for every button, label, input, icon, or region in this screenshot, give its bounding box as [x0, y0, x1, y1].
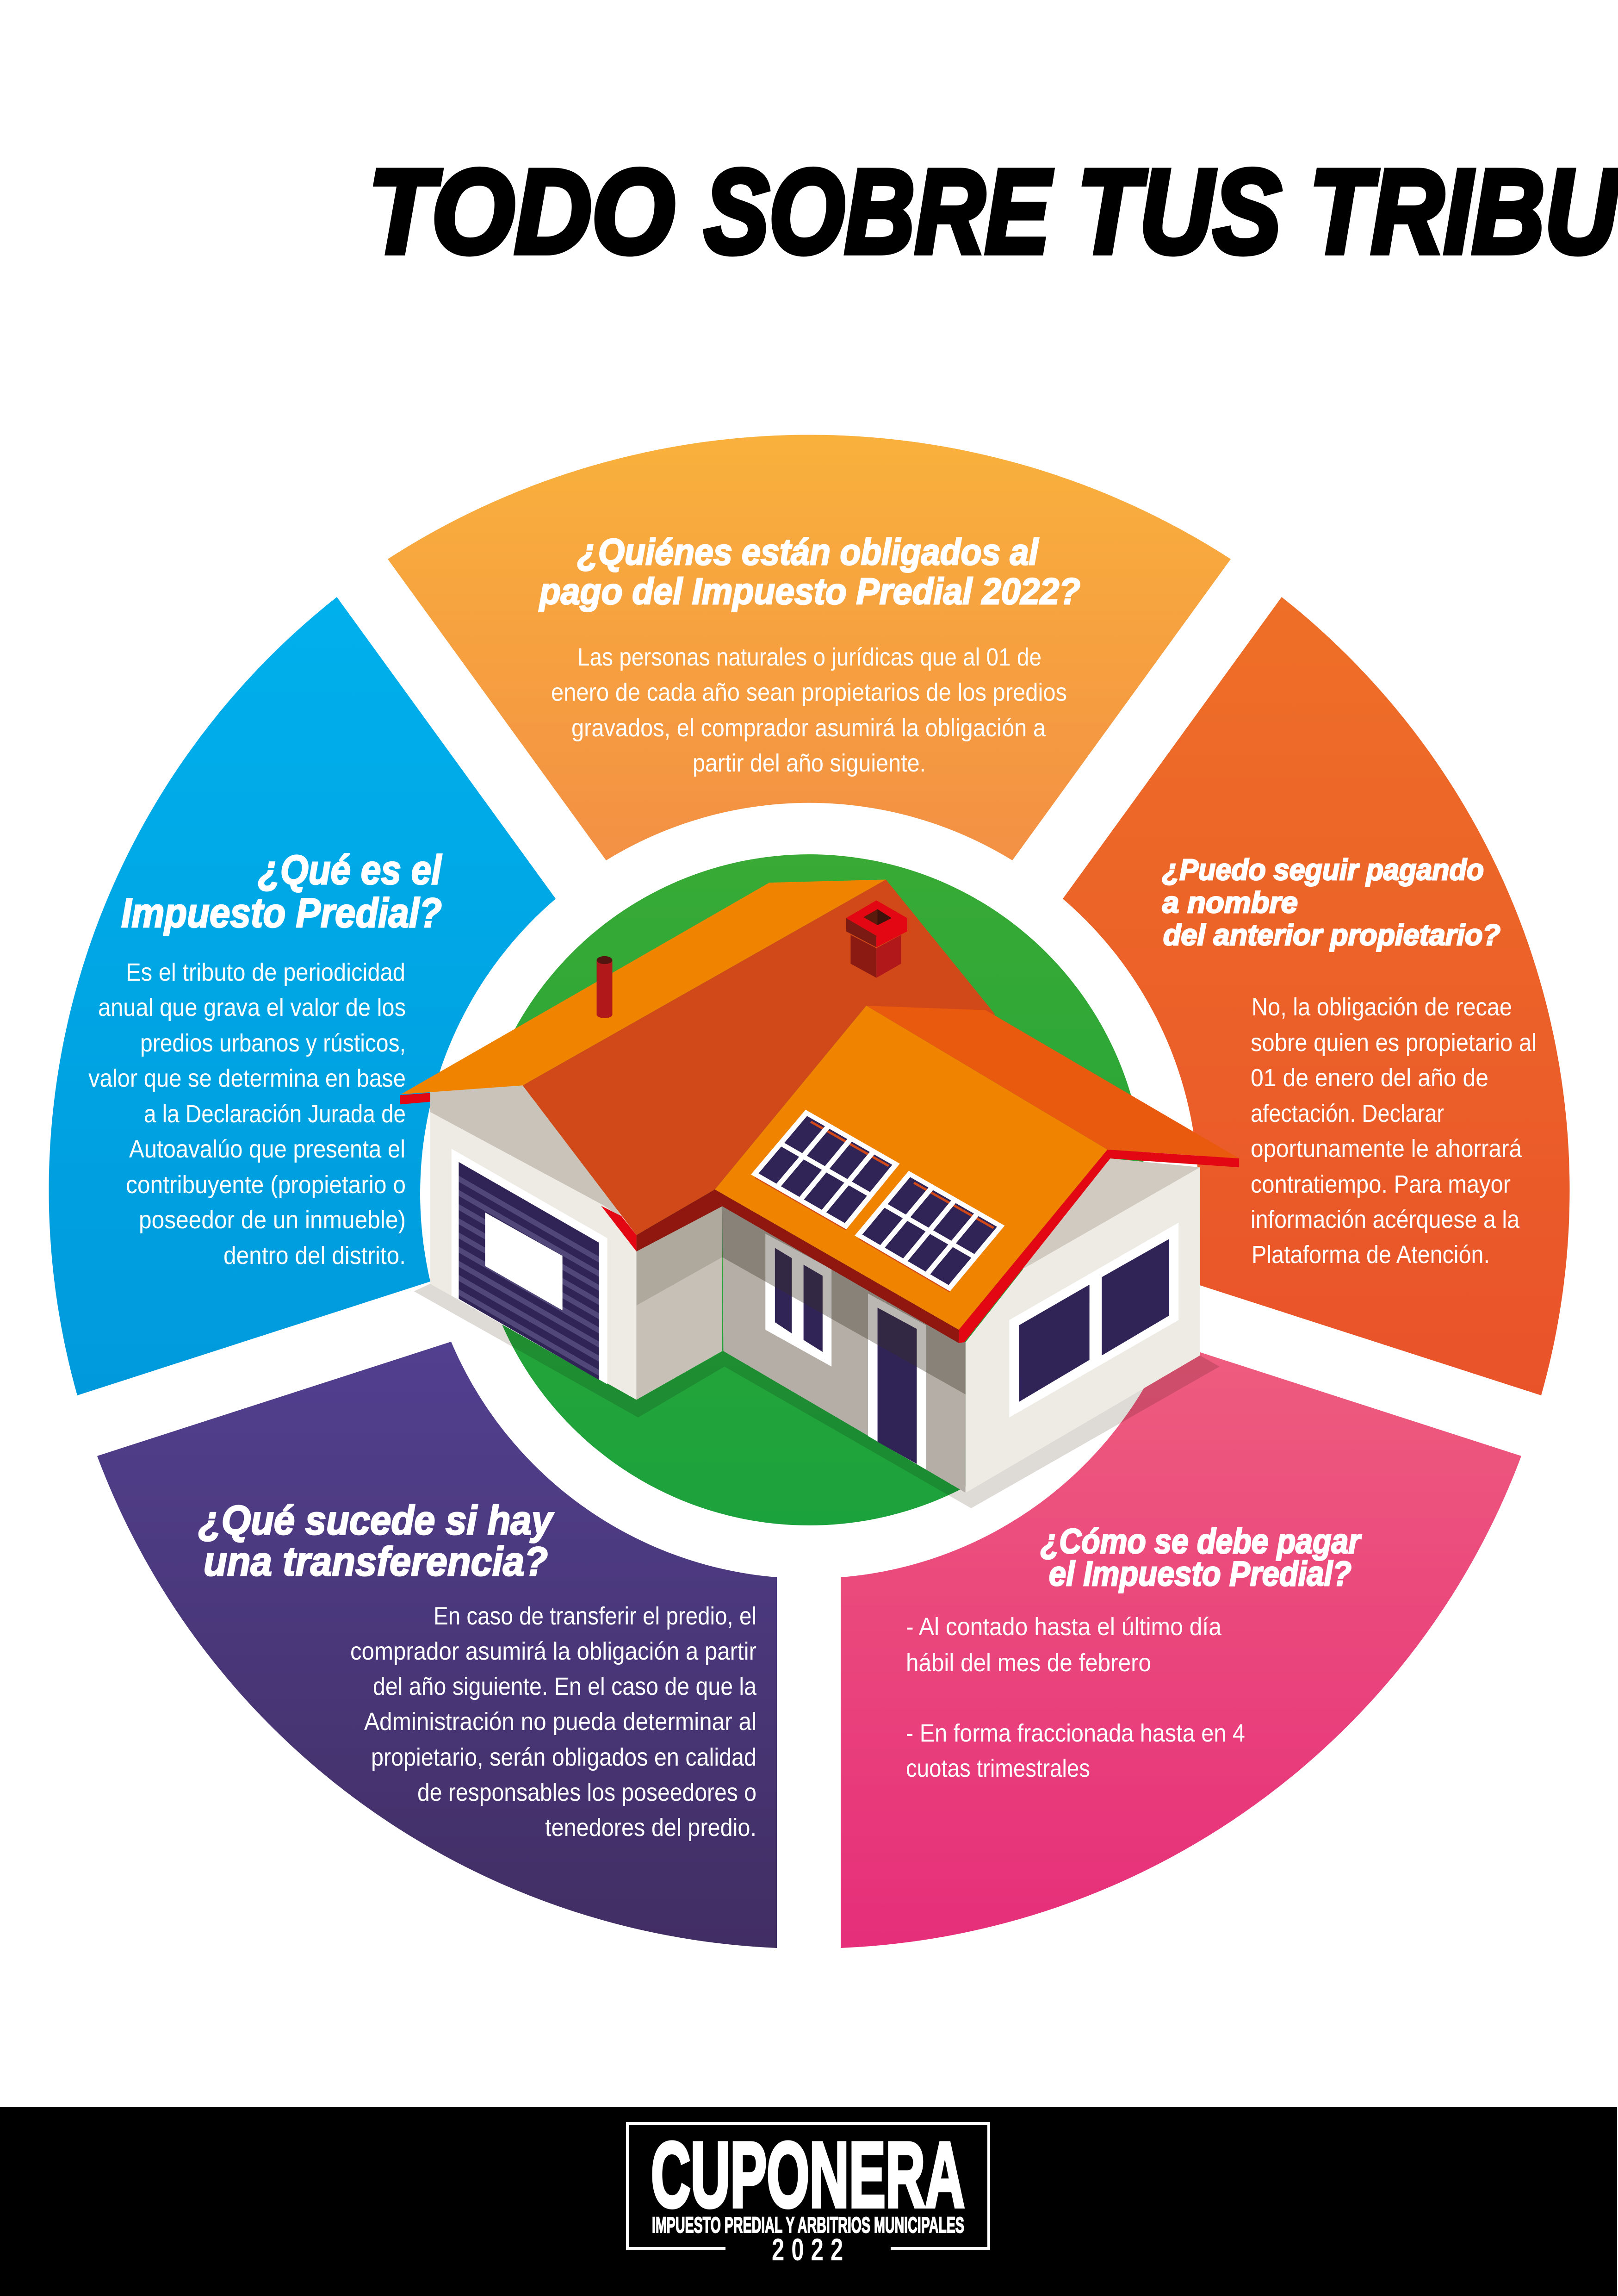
body text: que es: a la Declaración Jurada de: [144, 1100, 406, 1128]
heading: quienes: [539, 531, 1080, 612]
heading: que es: Impuesto Predial?: [121, 890, 442, 936]
panel: puedo seguir pagando: [1063, 597, 1570, 1395]
logo frame: [627, 2123, 989, 2248]
heading: puedo seguir: a nombre: [1162, 886, 1298, 919]
body text: que es: predios urbanos y rústicos,: [140, 1029, 406, 1057]
wedge: right orange: [1063, 597, 1570, 1395]
heading: transferencia: [198, 1497, 554, 1584]
left block wall: [430, 1081, 645, 1400]
body text: puedo seguir: 01 de enero del año de: [1251, 1064, 1488, 1092]
body text: que es: contribuyente (propietario o: [126, 1171, 406, 1199]
body text: transferencia: del año siguiente. En el caso de que la: [373, 1673, 757, 1700]
window: [765, 1234, 831, 1367]
body text: como pagar: hábil del mes de febrero: [906, 1649, 1151, 1677]
body text: quienes: enero de cada año sean propietarios de los predios: [551, 678, 1067, 706]
body text: puedo seguir: Plataforma de Atención.: [1252, 1241, 1490, 1269]
heading: como pagar: el Impuesto Predial?: [1049, 1554, 1351, 1593]
body text: que es: anual que grava el valor de los: [98, 994, 406, 1021]
body text: que es: valor que se determina en base: [88, 1064, 406, 1092]
body text: transferencia: de responsables los poseedores o: [417, 1779, 756, 1806]
panel: quienes estan obligados: [388, 435, 1231, 860]
body text: transferencia: [350, 1602, 757, 1842]
body text: como pagar: - En forma fraccionada hasta en 4: [906, 1719, 1245, 1747]
body text: puedo seguir: afectación. Declarar: [1251, 1100, 1444, 1127]
body text: transferencia: comprador asumirá la obligación a partir: [350, 1637, 756, 1665]
body text: que es: Autoavalúo que presenta el: [129, 1135, 405, 1163]
door: [868, 1294, 926, 1470]
footer band: [0, 2107, 1617, 2296]
body text: como pagar: cuotas trimestrales: [906, 1755, 1090, 1782]
body text: que es: Es el tributo de periodicidad: [126, 958, 405, 986]
body text: puedo seguir: oportunamente le ahorrará: [1251, 1135, 1522, 1163]
body text: que es: dentro del distrito.: [223, 1242, 406, 1269]
logo: cuponera: CUPONERA: [651, 2123, 965, 2227]
title: TUS: [1077, 144, 1282, 278]
body text: que es: poseedor de un inmueble): [139, 1206, 406, 1234]
heading: que es: ¿Qué es el: [258, 846, 442, 893]
body text: quienes: Las personas naturales o jurídicas que al 01 de: [577, 643, 1041, 671]
heading: transferencia: una transferencia?: [204, 1538, 548, 1584]
heading: quienes: ¿Quiénes están obligados al: [577, 531, 1039, 572]
house ground shadow: [414, 1284, 1220, 1508]
heading: quienes: pago del Impuesto Predial 2022?: [539, 571, 1080, 612]
icon: chimney: [846, 900, 907, 978]
green circle: [474, 854, 1145, 1525]
heading: como pagar: [1041, 1522, 1362, 1593]
panel: que es el impuesto predial: [49, 597, 556, 1395]
body text: puedo seguir: No, la obligación de recae: [1252, 993, 1512, 1021]
title: TODO: [368, 144, 675, 278]
body text: quienes: gravados, el comprador asumirá la obligación a: [571, 714, 1046, 742]
body text: como pagar: [906, 1613, 1245, 1782]
body text: transferencia: propietario, serán obligados en calidad: [371, 1743, 756, 1771]
body text: puedo seguir: [1251, 993, 1537, 1269]
wedge: top amber: [388, 435, 1231, 860]
body text: transferencia: tenedores del predio.: [545, 1814, 756, 1842]
solar panel right: [858, 1174, 1001, 1292]
solar panel left: [755, 1113, 896, 1230]
wedge: left blue: [49, 597, 556, 1395]
body text: puedo seguir: sobre quien es propietario al: [1251, 1029, 1537, 1057]
wedge: bottom-left purple: [97, 1342, 777, 1948]
body text: transferencia: En caso de transferir el predio, el: [434, 1602, 756, 1630]
logo year: 2022: [772, 2232, 850, 2267]
body text: como pagar: - Al contado hasta el último día: [906, 1613, 1222, 1641]
body text: transferencia: Administración no pueda determinar al: [364, 1708, 756, 1736]
icon: vent pipe: [597, 956, 612, 1018]
roof: [400, 879, 1239, 1343]
title: SOBRE: [704, 144, 1054, 278]
wedge: bottom-right pink: [841, 1342, 1521, 1948]
heading: transferencia: ¿Qué sucede si hay: [198, 1497, 554, 1543]
body text: quienes: partir del año siguiente.: [693, 749, 926, 777]
recessed wall: [637, 1206, 722, 1400]
panel: que sucede si hay una transferencia: [97, 1342, 777, 1948]
front wall with window and door: [722, 1206, 966, 1493]
right block wall: [966, 1158, 1200, 1493]
body text: quienes: [551, 643, 1067, 777]
heading: que es: [121, 846, 442, 936]
title: [368, 144, 1618, 278]
body text: que es: [88, 958, 406, 1269]
body text: puedo seguir: contratiempo. Para mayor: [1251, 1170, 1511, 1198]
body text: puedo seguir: información acérquese a la: [1251, 1206, 1520, 1233]
panel: como se debe pagar: [841, 1342, 1521, 1948]
heading: puedo seguir: [1162, 853, 1500, 952]
heading: como pagar: ¿Cómo se debe pagar: [1041, 1522, 1362, 1561]
heading: puedo seguir: del anterior propietario?: [1163, 918, 1500, 952]
heading: puedo seguir: ¿Puedo seguir pagando: [1162, 853, 1484, 886]
logo subtitle: IMPUESTO PREDIAL Y ARBITRIOS MUNICIPALES: [652, 2213, 964, 2238]
illustration: isometric house: [400, 879, 1239, 1508]
